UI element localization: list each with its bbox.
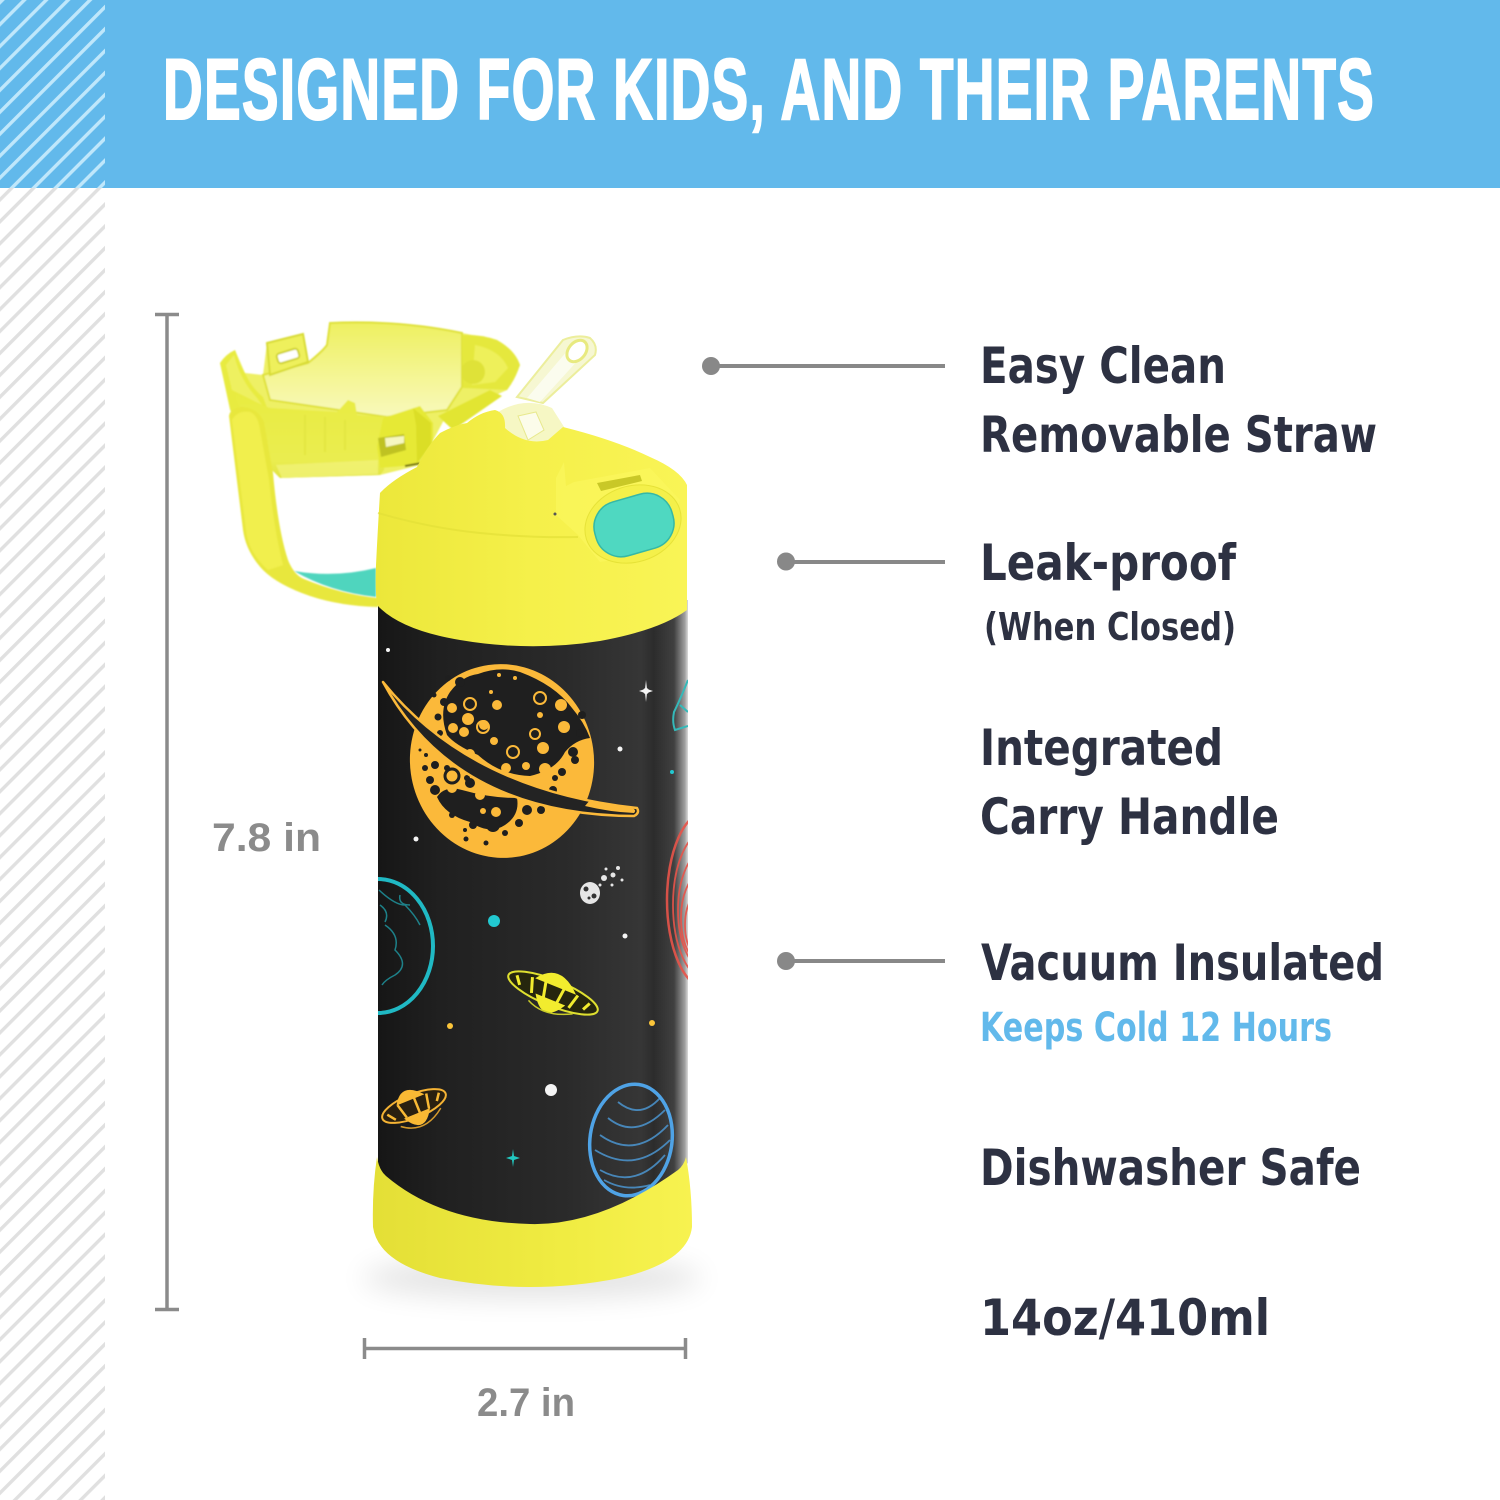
orange ufo xyxy=(381,1088,447,1129)
handle strap xyxy=(229,407,378,607)
connector arm xyxy=(438,390,502,430)
teal button xyxy=(588,487,680,563)
yellow dots xyxy=(447,1020,655,1029)
leader: straw xyxy=(702,357,945,375)
width dimension xyxy=(364,1338,686,1359)
feature: easy clean removable straw: Removable Straw xyxy=(980,406,1377,464)
bottle cap xyxy=(376,410,687,646)
feature: vacuum insulated xyxy=(980,934,1384,1051)
cyan dot xyxy=(488,915,500,927)
bottle illustration xyxy=(220,322,745,1298)
height dimension xyxy=(155,314,179,1310)
ringed planet xyxy=(383,652,638,870)
width label: 2.7 in xyxy=(477,1381,575,1425)
feature: dishwasher safe: Dishwasher Safe xyxy=(980,1139,1361,1197)
feature: capacity: 14oz/410ml xyxy=(980,1289,1270,1347)
lid right mount xyxy=(462,335,520,390)
teal star xyxy=(506,1149,520,1167)
feature: easy clean removable straw xyxy=(980,337,1377,464)
title: DESIGNED FOR KIDS, AND THEIR PARENTS xyxy=(163,43,1374,138)
leader: leak-proof xyxy=(777,552,945,570)
shadow xyxy=(362,1258,702,1298)
star dots xyxy=(386,648,653,1096)
straw xyxy=(498,336,596,446)
leader: insulation xyxy=(777,952,945,970)
hinge xyxy=(377,406,433,468)
red planet xyxy=(666,820,688,980)
teal rocket xyxy=(673,680,688,730)
cap seam xyxy=(378,513,578,537)
blue planet xyxy=(588,1082,674,1198)
lid silhouette xyxy=(220,323,520,478)
striped corner in header xyxy=(0,0,105,188)
space artwork xyxy=(378,648,688,1198)
feature: vacuum insulated: Keeps Cold 12 Hours xyxy=(980,1005,1332,1051)
feature: easy clean removable straw: Easy Clean xyxy=(980,337,1226,395)
lid front wall xyxy=(232,390,387,478)
height label: 7.8 in xyxy=(212,816,321,860)
feature: vacuum insulated: Vacuum Insulated xyxy=(981,934,1384,992)
lid back wall xyxy=(263,322,462,417)
striped left margin xyxy=(0,188,105,1500)
bottle body xyxy=(378,600,688,1229)
feature: integrated carry handle xyxy=(980,719,1279,846)
yellow ufo xyxy=(507,970,599,1016)
feature: leak-proof: (When Closed) xyxy=(984,605,1236,649)
feature: leak-proof xyxy=(980,534,1236,649)
teal grip xyxy=(294,568,376,597)
ring craters xyxy=(464,692,546,758)
black craters xyxy=(418,675,586,846)
lid and handle xyxy=(220,322,520,607)
cyan planet xyxy=(378,877,435,1015)
bottle base xyxy=(373,1157,692,1287)
feature: leak-proof: Leak-proof xyxy=(980,534,1236,592)
comet xyxy=(580,866,624,904)
feature: integrated carry handle: Integrated xyxy=(980,719,1223,777)
header band xyxy=(0,0,1500,188)
cap latch xyxy=(554,462,691,575)
planet ring xyxy=(383,682,638,816)
lid left rim xyxy=(220,350,271,418)
yellow craters xyxy=(447,673,570,817)
feature: integrated carry handle: Carry Handle xyxy=(980,788,1279,846)
lid tab xyxy=(267,334,308,375)
